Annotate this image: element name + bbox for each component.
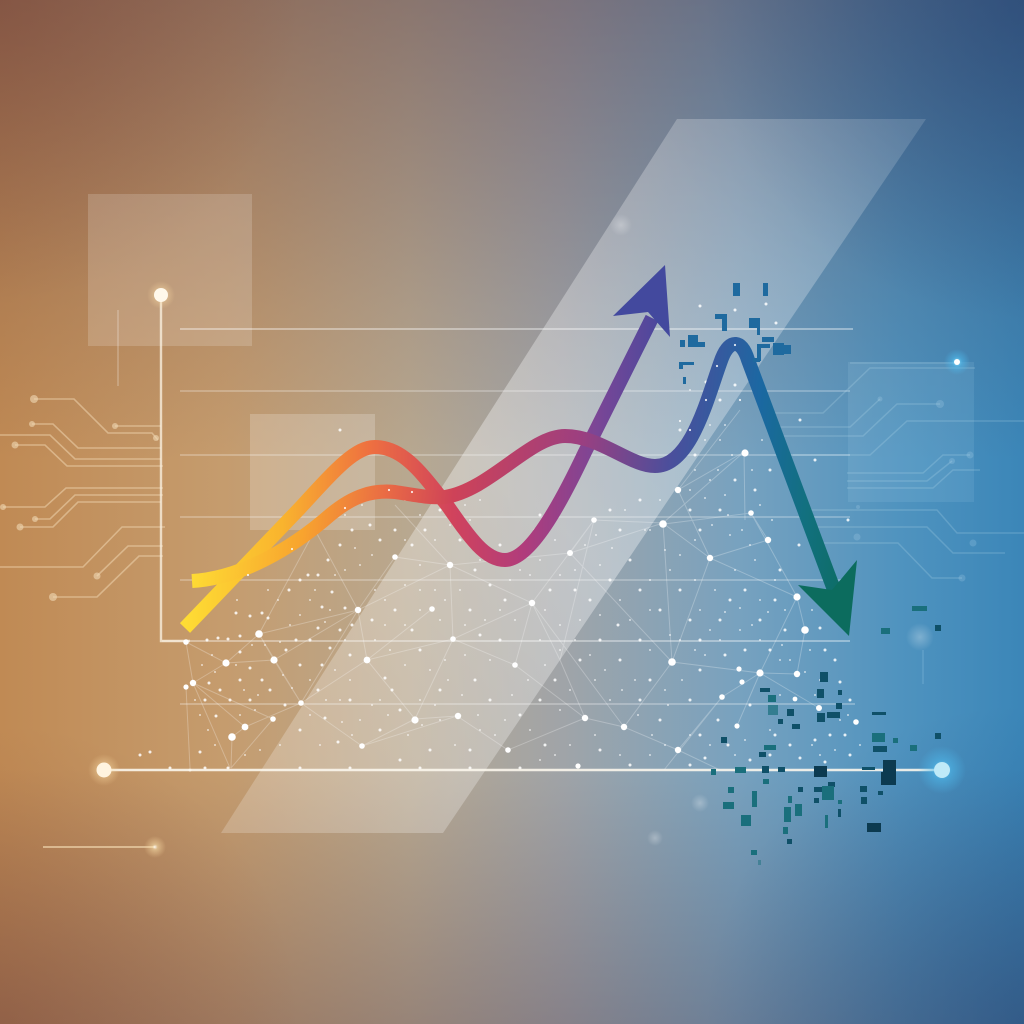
horizontal grid lines (162, 329, 855, 704)
circuit traces left (0, 395, 165, 601)
dissolving pixels near peak (679, 283, 791, 384)
circuit traces right (773, 363, 1024, 582)
arrowhead down (798, 560, 857, 636)
translucent square middle (250, 414, 375, 530)
arrowhead up (613, 265, 670, 337)
translucent square right (848, 362, 974, 502)
particles over the lines (248, 345, 740, 575)
glowing light spots (610, 214, 970, 846)
dissolving pixels near base (711, 606, 941, 865)
chart vertical axis with node (147, 281, 190, 641)
translucent square top left (88, 194, 252, 346)
trend line two peak and fall with arrow (192, 344, 857, 636)
small scattered particles (140, 304, 850, 770)
network connecting lines (186, 410, 819, 770)
grid-aligned bright nodes (183, 449, 859, 769)
base horizontal axis with end nodes (88, 746, 966, 794)
translucent parallelogram panel (221, 119, 926, 833)
particle network (140, 304, 860, 770)
trend line one rising with arrow (185, 265, 670, 628)
faint vertical tick (117, 310, 119, 386)
glow line bottom left (43, 836, 166, 858)
